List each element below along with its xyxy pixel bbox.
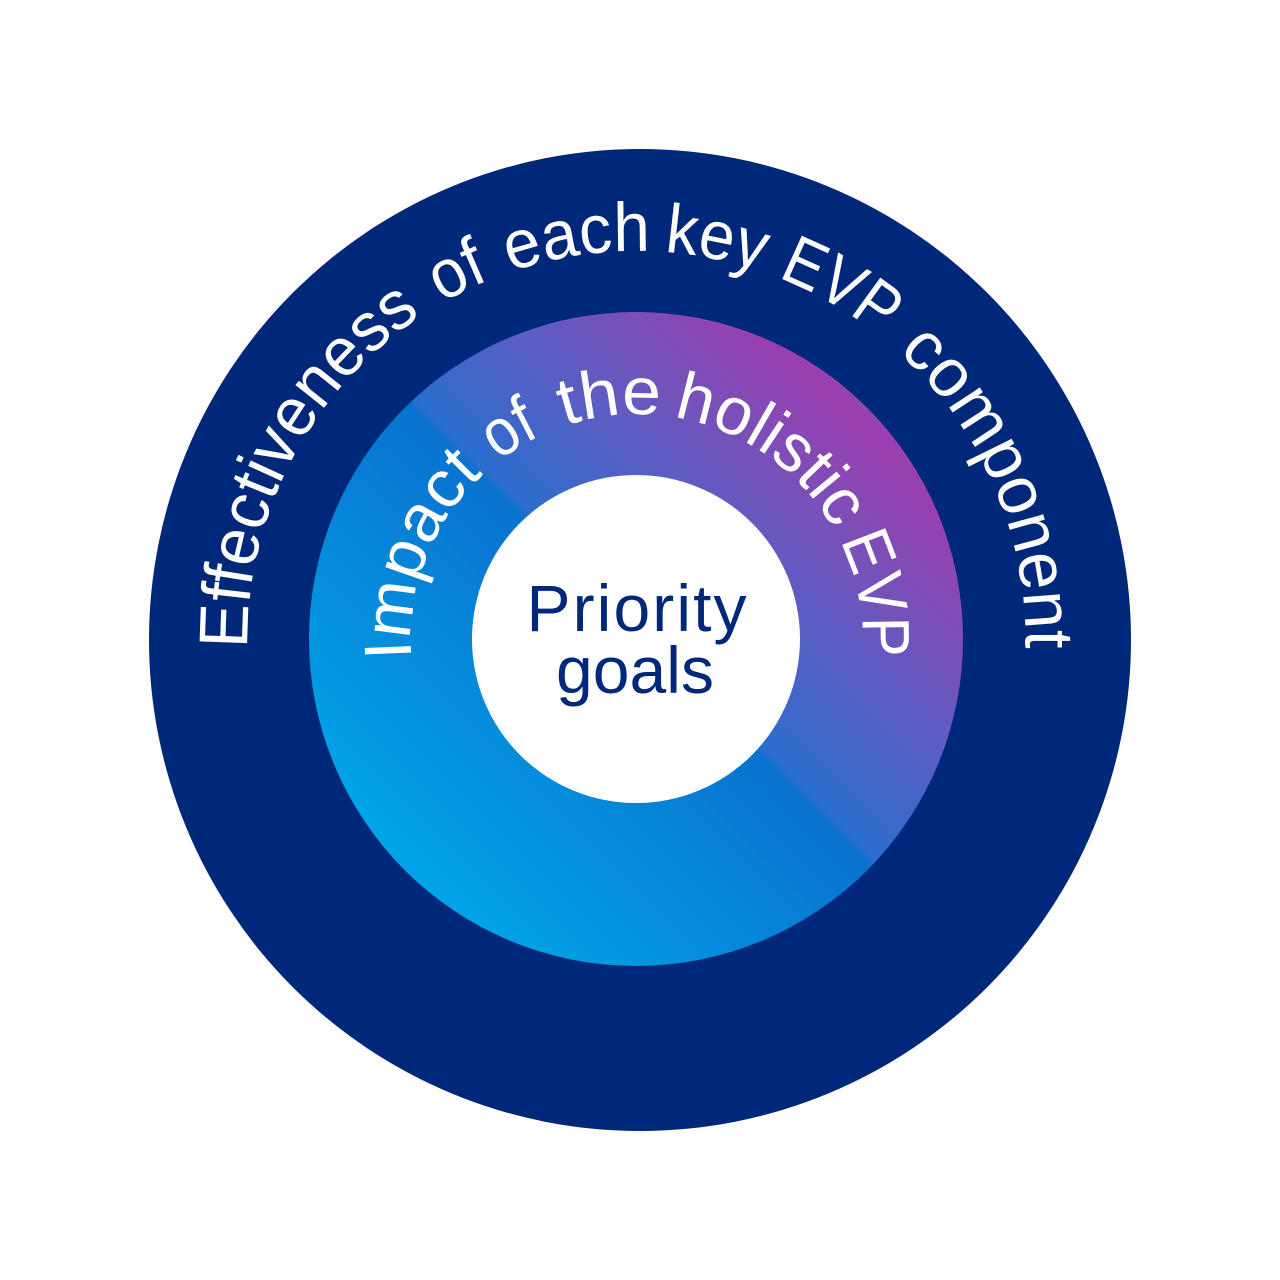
outer ring label: EVP bbox=[782, 236, 901, 320]
inner circle label: first line: Priority bbox=[526, 571, 746, 645]
outer ring label: Effectiveness bbox=[200, 291, 416, 644]
outer ring label: of bbox=[432, 234, 484, 298]
middle ring: holistic EVP impact bbox=[309, 312, 963, 966]
inner circle label: second line: goals bbox=[556, 633, 714, 707]
outer ring label: each bbox=[506, 201, 646, 268]
outer ring label: component bbox=[906, 333, 1070, 648]
outer ring: EVP component effectiveness bbox=[149, 149, 1131, 1131]
middle ring label: holistic bbox=[678, 370, 859, 524]
middle ring label: the bbox=[556, 370, 658, 424]
middle ring label: of bbox=[486, 392, 536, 455]
middle ring label: EVP bbox=[842, 528, 909, 654]
middle ring label bbox=[364, 370, 909, 654]
middle ring label: Impact bbox=[364, 448, 483, 654]
inner circle: priority goals bbox=[472, 475, 800, 803]
outer ring label: key bbox=[668, 202, 771, 278]
outer ring label bbox=[200, 201, 1070, 648]
